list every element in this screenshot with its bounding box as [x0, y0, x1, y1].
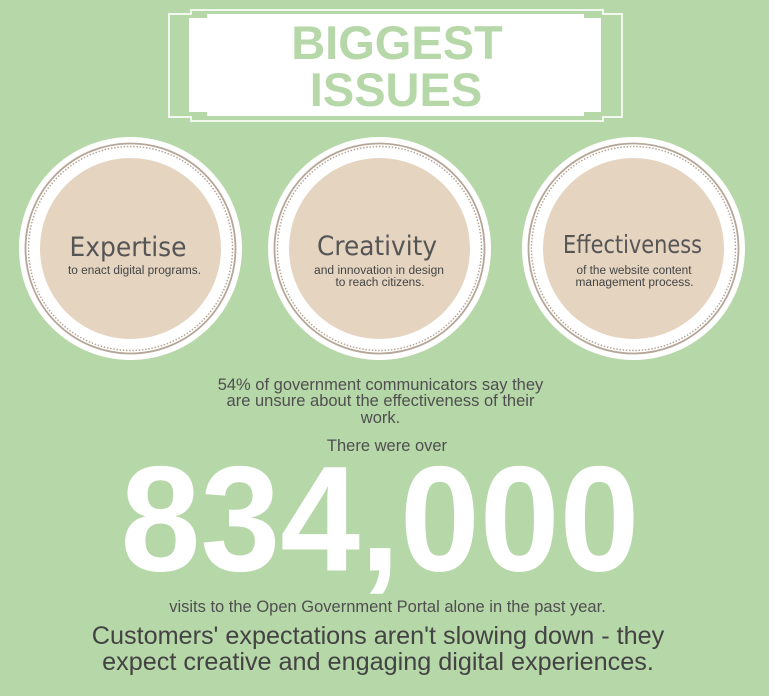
circle: creativity: to reach citizens.	[336, 277, 424, 289]
visits text: visits to the Open Government Portal alone in the past year.	[169, 598, 606, 616]
circle: creativity	[268, 137, 491, 360]
big number: 834,000	[121, 436, 639, 603]
closing statement	[92, 622, 664, 676]
circle: expertise	[19, 137, 242, 360]
circle: creativity: Creativity	[317, 231, 437, 262]
circle: expertise: Expertise	[70, 232, 186, 263]
circle: creativity: and innovation in design	[314, 265, 444, 277]
statistic paragraph: are unsure about the effectiveness of their	[227, 392, 534, 410]
circle: effectiveness	[522, 137, 745, 360]
statistic paragraph	[218, 376, 544, 427]
title banner	[168, 9, 623, 122]
lead-in text: There were over	[327, 437, 447, 455]
circle: effectiveness: management process.	[576, 277, 694, 289]
statistic paragraph: 54% of government communicators say they	[218, 376, 543, 394]
title banner: ISSUES	[310, 63, 482, 116]
banner frame	[169, 10, 622, 121]
circle: effectiveness: Effectiveness	[563, 230, 702, 259]
title text: BIGGEST	[291, 16, 503, 69]
circle: expertise: to enact digital programs.	[68, 265, 201, 277]
circle: effectiveness: of the website content	[576, 265, 692, 277]
closing statement: expect creative and engaging digital experiences.	[102, 648, 654, 676]
statistic paragraph: work.	[361, 409, 400, 427]
closing statement: Customers' expectations aren't slowing down - they	[92, 622, 664, 650]
